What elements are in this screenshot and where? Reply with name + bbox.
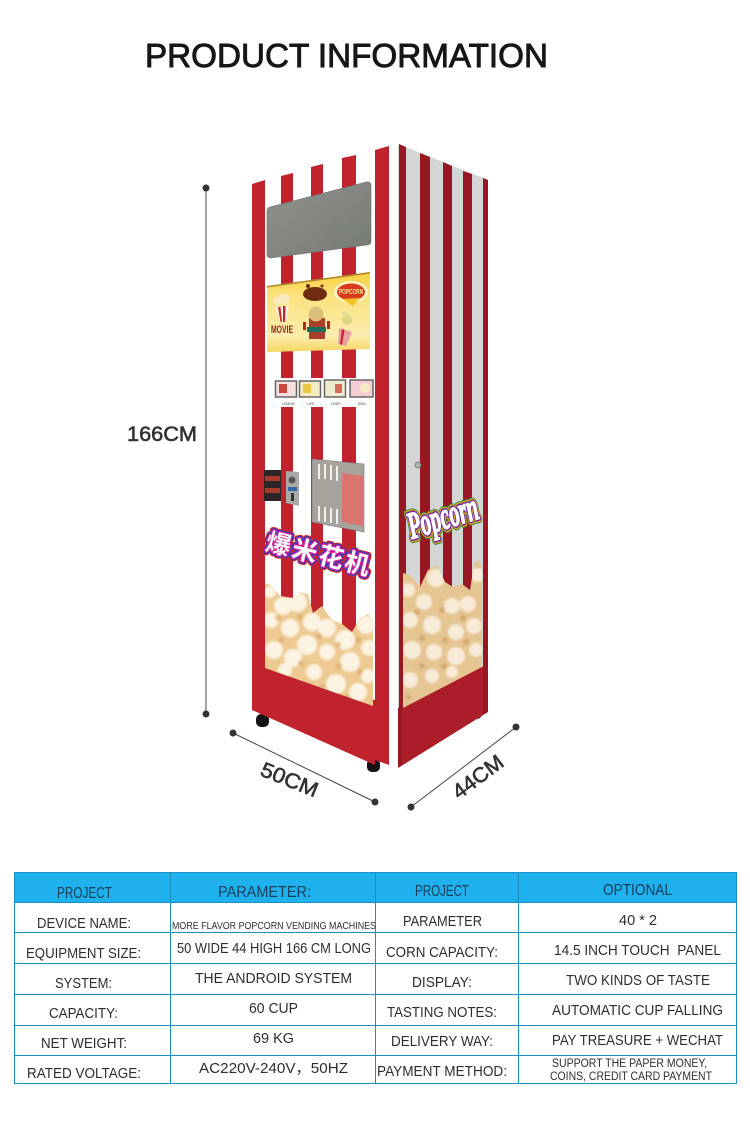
right side face <box>398 144 488 768</box>
header row: OPTIONAL <box>603 882 672 899</box>
row: system: SYSTEM: <box>55 975 112 992</box>
row: capacity: AUTOMATIC CUP FALLING <box>552 1002 723 1019</box>
side lock <box>415 462 421 468</box>
row: device name: 40 * 2 <box>619 912 657 929</box>
width dimension <box>230 730 378 806</box>
height dimension: 166CM <box>127 423 197 446</box>
front popcorn image <box>265 583 373 706</box>
title: PRODUCT INFORMATION <box>145 38 548 75</box>
row: net weight <box>41 1030 723 1052</box>
bill acceptor <box>264 470 281 501</box>
row: rated voltage: SUPPORT THE PAPER MONEY, <box>552 1058 707 1070</box>
chinese machine logo: 爆米花机 <box>263 528 375 582</box>
mascot bucket <box>303 306 330 339</box>
row: net weight: 69 KG <box>253 1030 294 1047</box>
dark brown splash <box>303 284 327 301</box>
height dimension <box>127 184 210 718</box>
top grey window <box>267 182 371 258</box>
row: device name <box>37 912 657 932</box>
row: capacity: CAPACITY: <box>49 1005 118 1022</box>
header row: PARAMETER: <box>218 884 311 901</box>
popcorn burst logo: POPCORN <box>339 289 363 296</box>
row: device name: DEVICE NAME: <box>37 915 131 932</box>
row: system: TWO KINDS OF TASTE <box>566 972 710 989</box>
row: capacity: 60 CUP <box>249 1000 298 1017</box>
front face <box>250 144 398 768</box>
popcorn side logo: Popcorn <box>402 486 483 548</box>
row: net weight: DELIVERY WAY: <box>391 1033 493 1050</box>
popcorn side logo <box>402 486 483 548</box>
wheels <box>256 708 482 772</box>
row: system: THE ANDROID SYSTEM <box>195 970 352 987</box>
row: system <box>55 970 710 992</box>
flavour button 2: LIFE <box>307 402 315 406</box>
popcorn side logo: Popcorn <box>402 486 483 548</box>
width dimension: 50CM <box>257 758 321 802</box>
row: device name: MORE FLAVOR POPCORN VENDING MACHINES <box>172 921 376 932</box>
row: system: DISPLAY: <box>412 974 472 991</box>
row: net weight: PAY TREASURE + WECHAT <box>552 1032 723 1049</box>
specification table <box>14 872 736 1084</box>
row: rated voltage: RATED VOLTAGE: <box>27 1065 141 1082</box>
row: capacity: TASTING NOTES: <box>387 1004 497 1021</box>
chinese machine logo: 爆米花机 <box>263 528 375 582</box>
row: rated voltage: COINS, CREDIT CARD PAYMENT <box>550 1071 712 1083</box>
row: equipment size <box>26 940 721 962</box>
row: net weight: NET WEIGHT: <box>41 1035 127 1052</box>
yellow promo screen <box>267 272 370 352</box>
table header band <box>14 872 736 902</box>
movie label: MOVIE <box>271 324 293 336</box>
flavour button 1: LEMON <box>282 402 295 406</box>
header row: PROJECT <box>415 883 469 900</box>
popcorn vending machine <box>250 144 488 772</box>
popcorn bucket, left <box>273 294 290 322</box>
flavour button 3: USER <box>331 402 341 406</box>
popcorn side logo: Popcorn <box>402 486 483 548</box>
row: rated voltage <box>27 1058 712 1083</box>
table grid <box>14 872 736 1084</box>
row: equipment size: CORN CAPACITY: <box>386 944 498 961</box>
chinese machine logo: 爆米花机 <box>263 528 375 582</box>
row: device name: PARAMETER <box>403 913 482 930</box>
coin slot <box>286 471 299 506</box>
row: equipment size: 50 WIDE 44 HIGH 166 CM LONG <box>177 940 371 957</box>
popcorn side logo: Popcorn <box>402 486 483 548</box>
depth dimension: 44CM <box>448 751 508 804</box>
header row: PROJECT <box>57 885 112 902</box>
row: equipment size: EQUIPMENT SIZE: <box>26 945 141 962</box>
row: capacity <box>49 1000 723 1022</box>
flavour button 4: KIWI <box>358 402 366 406</box>
depth dimension <box>408 724 520 810</box>
header row <box>57 882 672 902</box>
chinese machine logo: 爆米花机 <box>263 528 375 582</box>
flavour band <box>265 378 375 407</box>
row: rated voltage: PAYMENT METHOD: <box>377 1063 507 1080</box>
row: rated voltage: AC220V-240V，50HZ <box>199 1060 348 1077</box>
popcorn bucket, right <box>338 311 352 346</box>
dispensing window <box>312 459 364 532</box>
row: equipment size: 14.5 INCH TOUCH PANEL <box>554 942 721 959</box>
side popcorn image <box>401 558 485 710</box>
